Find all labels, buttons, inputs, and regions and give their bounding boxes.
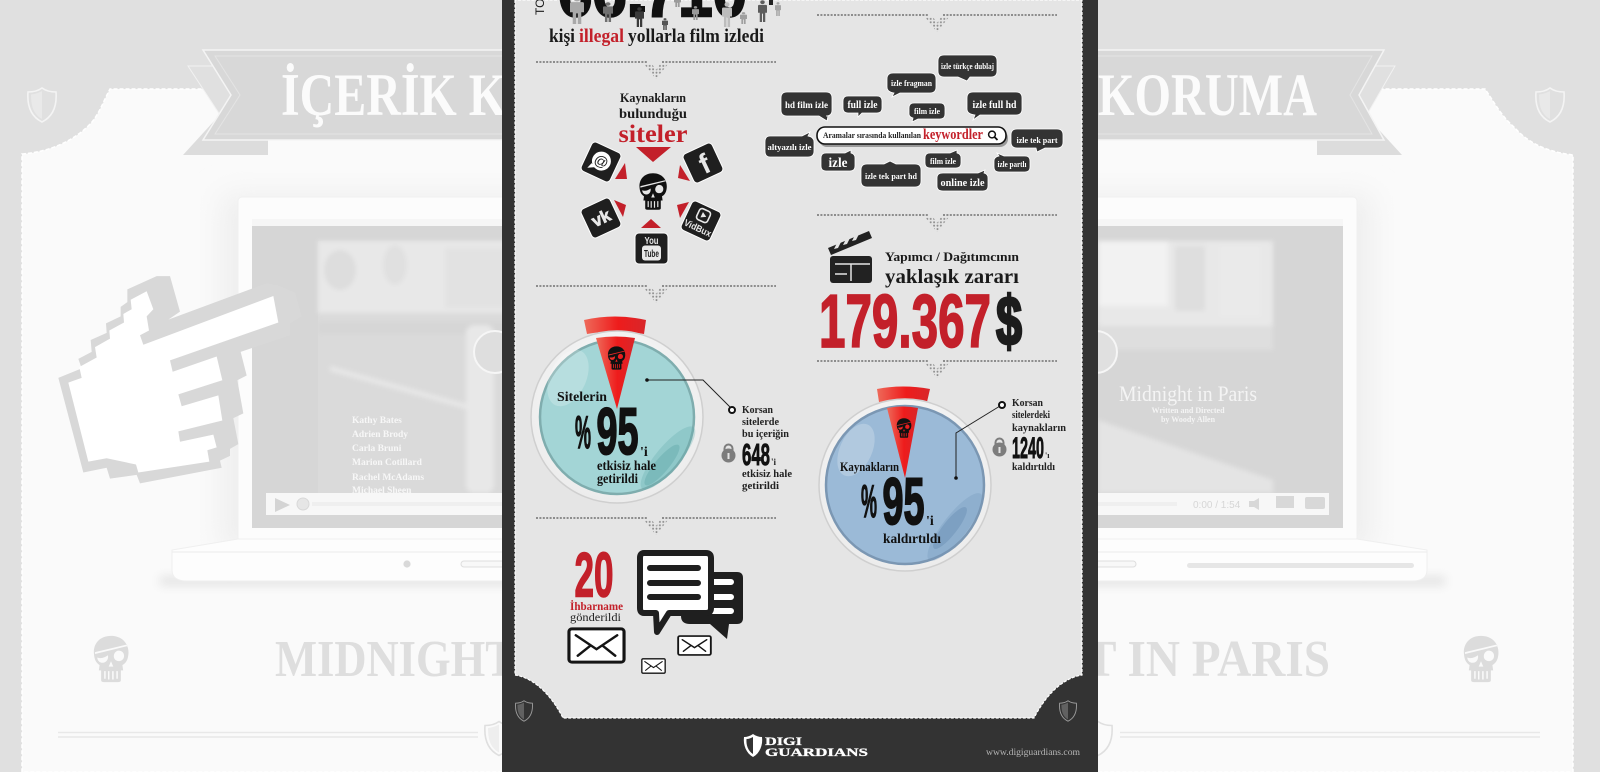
gauge text: etkisiz hale xyxy=(597,459,656,474)
bubble xyxy=(843,96,882,117)
icon: background shield left xyxy=(28,88,56,122)
callout line xyxy=(645,378,735,413)
gauge text xyxy=(840,460,941,546)
video controls xyxy=(266,493,1329,515)
gauge text: 'i xyxy=(640,445,648,460)
divider xyxy=(817,15,1057,32)
icon: lock xyxy=(992,438,1006,456)
icon: clapperboard xyxy=(828,231,872,283)
bubble xyxy=(925,150,961,168)
chart: sites gauge 95 percent xyxy=(531,316,792,503)
gauge face xyxy=(826,406,984,564)
icon: at sign site: @ xyxy=(592,151,611,171)
icon: youtube: Tube xyxy=(644,248,659,260)
callout text xyxy=(742,405,792,492)
icon: skull xyxy=(897,418,911,438)
video right: Midnight in Paris xyxy=(1119,381,1257,406)
loss figure: 179.367 xyxy=(819,279,991,363)
search bar: keywordler xyxy=(923,127,983,143)
search bar xyxy=(817,127,1008,147)
bubble: izle fragman xyxy=(891,79,933,88)
icon: envelope large xyxy=(569,629,624,662)
bubble: izle tek part xyxy=(1016,135,1058,145)
red wedge xyxy=(887,406,918,478)
callout text: bu içeriğin xyxy=(742,429,789,440)
laptop xyxy=(160,195,1445,585)
gauge cap xyxy=(584,316,646,334)
bubble: film izle xyxy=(914,107,940,116)
panel: central dark column xyxy=(502,0,1098,772)
bubble xyxy=(909,103,945,122)
icon: facebook: f xyxy=(694,148,716,180)
video left: Carla Bruni xyxy=(352,444,402,454)
gauge face xyxy=(540,340,694,494)
icon: youtube xyxy=(635,233,668,264)
icon: lock xyxy=(722,444,736,462)
bubble: film izle xyxy=(930,157,956,166)
bubble xyxy=(938,55,997,81)
callout text: 648 xyxy=(742,437,770,472)
caption: gönderildi xyxy=(570,612,621,624)
website url: www.digiguardians.com xyxy=(986,747,1080,757)
caption xyxy=(570,599,623,624)
icon: shield right xyxy=(1059,701,1077,721)
divider xyxy=(817,361,1057,378)
divider xyxy=(536,62,776,79)
bubble: izle tek part hd xyxy=(865,171,917,181)
gauge bezel xyxy=(819,399,991,571)
section: notices sent xyxy=(569,540,743,673)
video left: Michael Sheen xyxy=(352,486,412,496)
callout text: sitelerdeki xyxy=(1012,410,1050,421)
gauge text: % xyxy=(575,406,591,458)
title: KORUMA xyxy=(1098,62,1317,128)
gauge text: Sitelerin xyxy=(557,390,607,405)
gauge text xyxy=(557,390,656,487)
icon: envelope small xyxy=(642,659,665,673)
icon: vk: vk xyxy=(589,206,614,231)
video left: Rachel McAdams xyxy=(352,473,424,483)
icon: vk xyxy=(580,197,622,239)
icon: at sign site xyxy=(580,141,622,183)
icon: background shields centre xyxy=(485,722,1112,756)
heading: Yapımcı / Dağıtımcının xyxy=(885,250,1019,264)
callout text: Korsan xyxy=(1012,398,1043,409)
divider xyxy=(536,518,776,535)
icon: vidbux xyxy=(680,200,722,242)
gauge text: kaldırtıldı xyxy=(883,531,941,546)
callout line xyxy=(954,402,1005,480)
section: keyword search cloud xyxy=(765,55,1063,191)
logo: GUARDIANS xyxy=(765,745,868,759)
headline: total illegal viewers xyxy=(533,0,781,47)
video controls: 0:00 / 1:54 xyxy=(1193,500,1241,511)
background movie title: T IN PARIS xyxy=(1085,631,1330,688)
bubble xyxy=(1011,129,1063,152)
bubble: izle türkçe dublaj xyxy=(941,62,994,71)
heading: bulunduğu xyxy=(619,107,687,122)
red pointers xyxy=(614,147,690,228)
search bar: Aramalar sırasında kullanılan xyxy=(823,130,921,140)
gauge text: 95 xyxy=(596,394,638,468)
background movie title: MIDNIGHT xyxy=(275,631,515,688)
video right: by Woody Allen xyxy=(1161,415,1216,424)
chart: sources gauge 95 percent xyxy=(819,386,1066,571)
bubble: altyazılı izle xyxy=(768,143,812,152)
heading: Kaynakların xyxy=(620,90,687,105)
gauge text: getirildi xyxy=(597,472,638,487)
section: producer loss xyxy=(819,231,1022,363)
loss figure: $ xyxy=(996,282,1022,360)
icon: pirate skull xyxy=(639,173,667,210)
icon: facebook xyxy=(682,142,725,185)
panel: central light sheet xyxy=(515,0,1082,718)
bubble xyxy=(887,73,936,97)
callout text: 'i xyxy=(771,457,777,467)
callout text: kaldırtıldı xyxy=(1012,462,1055,473)
icon: vidbux: VidBux xyxy=(682,218,713,240)
count: 20 xyxy=(574,540,614,610)
video left xyxy=(318,241,516,496)
callout text: 1240 xyxy=(1012,432,1044,465)
bubble xyxy=(821,150,855,171)
icon: background skull left xyxy=(94,636,128,682)
callout text: 'ı xyxy=(1045,451,1050,460)
icon: background shield right xyxy=(1536,88,1564,122)
gauge text: 'i xyxy=(926,514,934,529)
bubble xyxy=(994,153,1030,172)
bubble xyxy=(967,92,1022,120)
divider xyxy=(817,215,1057,232)
gauge cap xyxy=(877,386,930,402)
section: pirate sites xyxy=(580,90,725,264)
icon: pixel hand cursor xyxy=(58,276,302,483)
gauge bezel xyxy=(531,331,703,503)
gauge text: % xyxy=(861,475,877,527)
bubble xyxy=(937,170,988,191)
bubble: full izle xyxy=(848,100,878,111)
title xyxy=(281,62,1317,128)
callout text: Korsan xyxy=(742,405,773,416)
caption: kişi xyxy=(549,27,575,47)
callout text xyxy=(1012,398,1066,473)
callout text: getirildi xyxy=(742,481,779,492)
gauge text: 95 xyxy=(882,464,924,538)
caption: illegal xyxy=(579,27,624,47)
video right: Written and Directed xyxy=(1151,406,1225,415)
icon: background skull right xyxy=(1464,636,1498,682)
logo xyxy=(744,734,868,759)
bubble: hd film izle xyxy=(785,101,828,111)
gauge text: Kaynakların xyxy=(840,460,899,474)
heading xyxy=(618,90,688,148)
callout text: etkisiz hale xyxy=(742,469,792,480)
gauge highlights xyxy=(539,343,703,496)
background rules xyxy=(58,732,1540,737)
callout text: sitelerde xyxy=(742,417,779,428)
caption: İhbarname xyxy=(570,599,623,613)
video left: Marion Cotillard xyxy=(352,458,423,468)
bubble xyxy=(765,132,814,157)
callout text: kaynakların xyxy=(1012,423,1066,434)
bubble xyxy=(781,92,832,121)
icon: speech bubbles xyxy=(640,553,743,639)
ribbon banner xyxy=(183,50,1402,155)
bubble: izle full hd xyxy=(972,100,1017,111)
video left: Kathy Bates xyxy=(352,416,402,426)
keyword bubbles xyxy=(765,55,1063,191)
bubble: izle partlı xyxy=(998,160,1027,169)
bubble: online izle xyxy=(940,178,985,189)
icon: shield left xyxy=(515,701,533,721)
title: İÇERİK K xyxy=(281,62,506,128)
caption: yollarla film izledi xyxy=(628,27,764,47)
logo: DIGI xyxy=(765,734,802,748)
video right xyxy=(1075,241,1273,493)
background movie title xyxy=(275,631,1330,688)
video left: Adrien Brody xyxy=(352,430,408,440)
caption xyxy=(549,27,764,47)
bubble xyxy=(861,161,921,187)
people icons xyxy=(570,0,781,30)
bubble: izle xyxy=(828,155,848,170)
icon: skull xyxy=(608,346,625,370)
gauge highlights xyxy=(830,418,990,567)
divider xyxy=(536,286,776,303)
footer xyxy=(515,701,1080,759)
red wedge xyxy=(596,336,635,409)
heading: siteler xyxy=(618,121,688,148)
icon: youtube: You xyxy=(644,235,658,247)
icon: envelope medium xyxy=(678,636,711,655)
section: producer loss: yaklaşık zararı xyxy=(885,266,1019,288)
